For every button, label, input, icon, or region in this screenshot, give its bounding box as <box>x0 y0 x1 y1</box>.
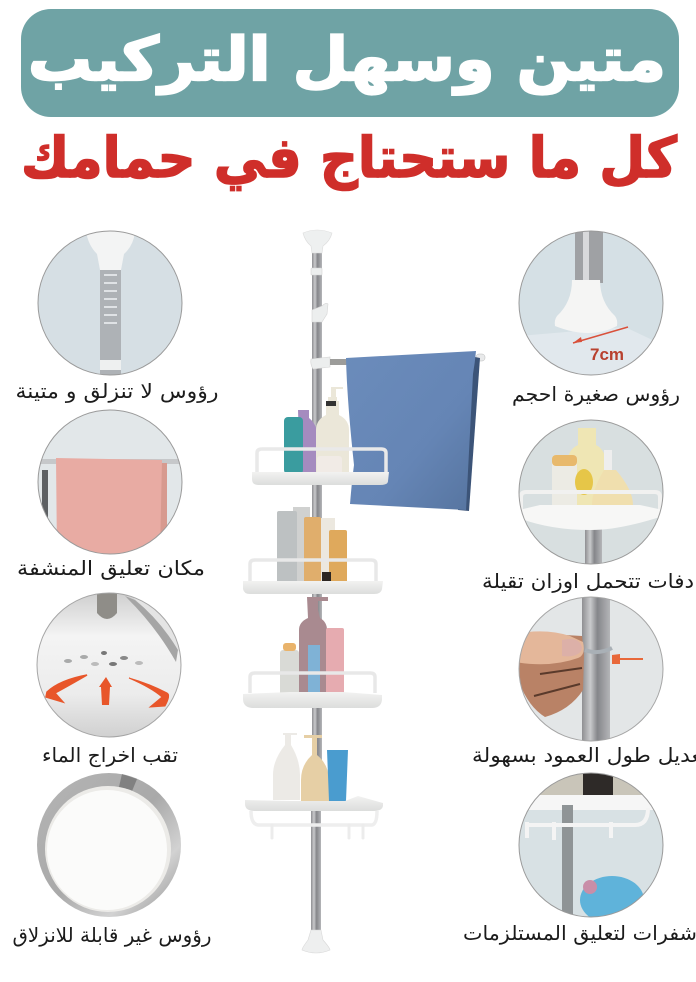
shelf 3 products <box>280 597 344 698</box>
right circle 2: strong shelf <box>519 420 663 565</box>
circle outline <box>519 420 663 564</box>
left circle 1: anti-slip head <box>38 231 182 375</box>
shelf 3 <box>243 673 382 708</box>
circle outline <box>37 593 181 737</box>
label: compact heads: رؤوس صغيرة احجم <box>512 382 680 406</box>
shelf 1 <box>252 449 389 485</box>
label: pole length adjustment: تعديل طول العمود بسهولة <box>472 743 696 767</box>
measurement arrow <box>573 327 628 343</box>
orange arrows <box>46 675 169 707</box>
shelf 1 products <box>284 387 349 475</box>
circle outline <box>519 773 663 917</box>
left circle 4: non-slip pad <box>37 773 181 917</box>
left circle 2: towel holder <box>38 410 182 554</box>
label: non-slip heads: رؤوس لا تنزلق و متينة <box>16 379 218 403</box>
label: non-slip heads: رؤوس غير قابلة للانزلاق <box>12 923 212 947</box>
label: towel hanging place: مكان تعليق المنشفة <box>17 556 205 580</box>
title text: متين وسهل التركيب <box>28 25 666 95</box>
shelf 4 with hanging bar <box>245 796 383 838</box>
top cap <box>303 230 332 253</box>
right circle 1: compact base 7cm <box>519 231 663 375</box>
label: shelves bear heavy weights: دفات تتحمل اوزان تقيلة <box>482 569 694 593</box>
circle outline <box>38 231 182 375</box>
shelf 4 products <box>273 733 348 801</box>
right circle 4: hanging hooks <box>519 773 663 924</box>
shelf 2 products <box>277 507 347 585</box>
title banner <box>21 9 679 117</box>
hand <box>515 632 584 717</box>
blue towel <box>346 351 480 511</box>
drain holes <box>64 651 143 666</box>
towel rod <box>330 354 485 365</box>
left circle 3: water drain holes <box>37 593 181 737</box>
bottom foot <box>302 930 330 953</box>
label: water drain holes: تقب اخراج الماء <box>42 743 178 767</box>
label: hooks for accessories: شفرات لتعليق المستلزمات <box>463 921 696 945</box>
circle outline <box>38 410 182 554</box>
circle outline <box>519 597 663 741</box>
pole clips <box>311 268 330 369</box>
shelf 2 <box>243 560 383 594</box>
pole <box>311 250 322 932</box>
central product: corner shelf pole <box>243 230 485 953</box>
circle outline <box>519 231 663 375</box>
blue sponge <box>580 876 643 916</box>
orange pointer <box>612 654 643 664</box>
7cm label: 7cm <box>590 345 624 364</box>
right circle 3: height adjustment <box>515 597 663 741</box>
